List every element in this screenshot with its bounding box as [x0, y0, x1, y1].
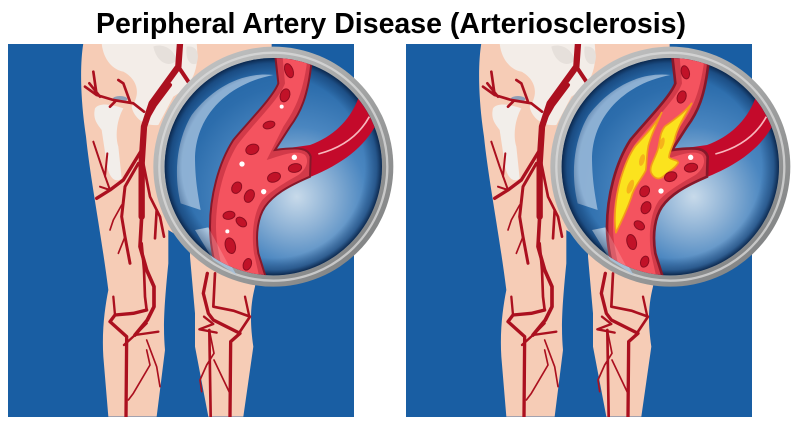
panel: arteriosclerosis [406, 43, 790, 417]
plaque deposits [615, 103, 692, 233]
magnifier: healthy vessel [153, 47, 393, 287]
magnifier: plaque-narrowed vessel [550, 47, 790, 287]
title: Peripheral Artery Disease (Arteriosclerosis) [96, 8, 686, 40]
panel: healthy artery [8, 43, 393, 417]
legs with arteries [81, 43, 272, 417]
legs with arteries [479, 43, 670, 417]
panel background [8, 44, 354, 417]
panel background [406, 44, 752, 417]
